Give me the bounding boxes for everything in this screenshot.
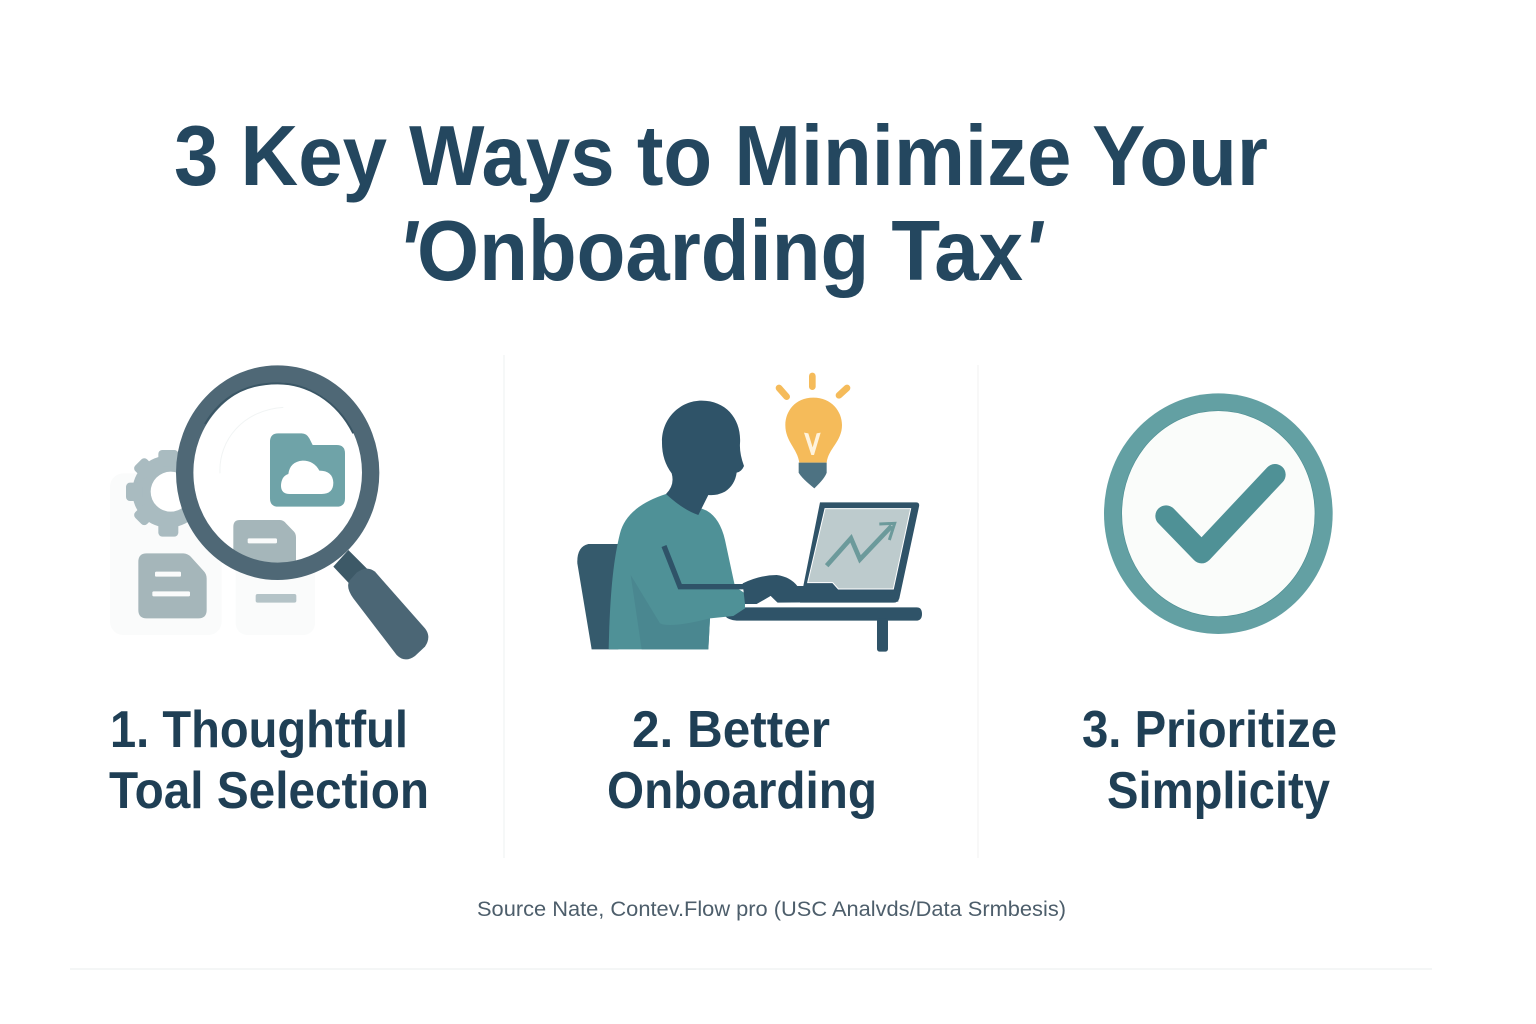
hand: [743, 575, 898, 604]
icon: gear: [126, 450, 205, 537]
heading 3: [1082, 701, 1337, 820]
title: [174, 109, 1268, 299]
magnifier ring: [185, 374, 371, 571]
heading 2: Onboarding: [607, 762, 877, 820]
icon: person at laptop with idea: [577, 376, 922, 652]
heading 3: 3. Prioritize: [1082, 701, 1337, 759]
panel: thoughtful tool selection: [109, 374, 429, 820]
magnifier lens: [193, 383, 362, 562]
document seen through lens: [233, 520, 296, 563]
heading 1: Toal Selection: [109, 762, 429, 820]
desk: [725, 607, 922, 652]
heading 3: Simplicity: [1107, 762, 1330, 820]
icon: document left: [138, 553, 207, 618]
magnifier handle: [333, 550, 428, 659]
heading 2: 2. Better: [632, 701, 830, 759]
heading 1: 1. Thoughtful: [110, 701, 408, 759]
title: 3 Key Ways to Minimize Your: [174, 109, 1268, 204]
heading 2: [607, 701, 877, 820]
icon: lower document bar: [256, 594, 296, 603]
icon: magnifying glass over tools: [110, 374, 428, 659]
chair: [577, 544, 622, 649]
body: [609, 494, 745, 649]
source note: Source Nate, Contev.Flow pro (USC Analvds/Data Srmbesis): [477, 898, 1066, 921]
icon: check mark in circle: [1104, 393, 1333, 634]
heading 1: [109, 701, 429, 820]
head and neck: [662, 401, 744, 515]
arm line: [664, 546, 747, 587]
panel: better onboarding: [577, 376, 922, 820]
icon: cloud folder: [270, 433, 345, 507]
laptop: [800, 502, 919, 603]
panel: prioritize simplicity: [1082, 393, 1337, 820]
faded background cards: [110, 473, 315, 635]
icon: light bulb: [779, 376, 847, 488]
title: 'Onboarding Tax': [398, 204, 1045, 299]
